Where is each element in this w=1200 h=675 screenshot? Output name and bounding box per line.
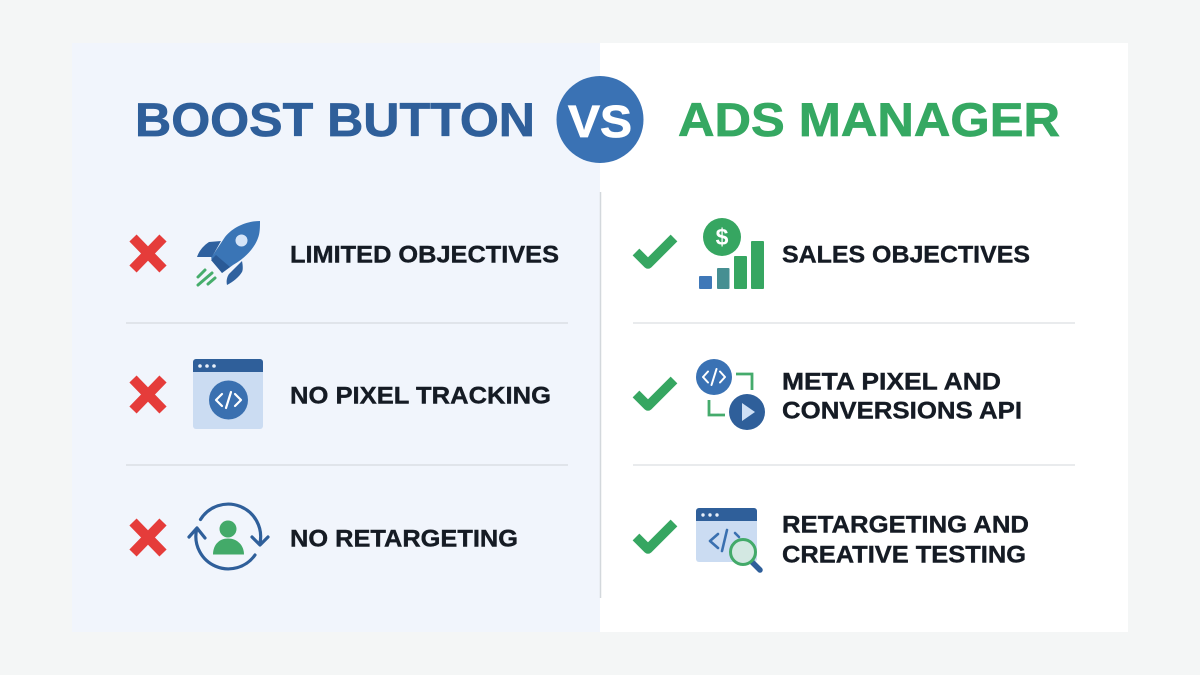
panel: boost button (72, 43, 600, 632)
icon: green check 2 (636, 380, 674, 406)
label: meta pixel and conversions api: CONVERSIONS API (782, 398, 1022, 424)
icon: red cross 3 (133, 522, 163, 553)
icon: dollar and bars (699, 218, 764, 289)
panel: ads manager (600, 43, 1128, 632)
vs badge (556, 76, 644, 163)
vs badge: VS (568, 96, 632, 147)
label: retargeting and creative testing: CREATIVE TESTING (782, 542, 1026, 568)
icon: code and play (696, 359, 765, 430)
label: sales objectives: SALES OBJECTIVES (782, 242, 1030, 268)
icon: red cross 1 (133, 238, 163, 269)
title: boost button: BOOST BUTTON (135, 93, 535, 146)
label: retargeting and creative testing (782, 512, 1029, 568)
icon: retargeting person (189, 504, 268, 569)
icon: green check 1 (636, 238, 674, 264)
icon: code window with magnifier (696, 508, 760, 570)
title: ads manager: ADS MANAGER (678, 93, 1060, 146)
label: no retargeting: NO RETARGETING (290, 526, 518, 552)
icon: dollar and bars: $ (716, 224, 729, 250)
label: limited objectives: LIMITED OBJECTIVES (290, 242, 559, 268)
icon: green check 3 (636, 523, 674, 549)
label: meta pixel and conversions api: META PIXEL AND (782, 368, 1001, 396)
label: meta pixel and conversions api (782, 368, 1022, 424)
label: no pixel tracking: NO PIXEL TRACKING (290, 382, 551, 410)
icon: browser code window (193, 359, 263, 429)
icon: red cross 2 (133, 379, 163, 410)
label: retargeting and creative testing: RETARGETING AND (782, 512, 1029, 538)
icon: rocket (197, 221, 260, 285)
